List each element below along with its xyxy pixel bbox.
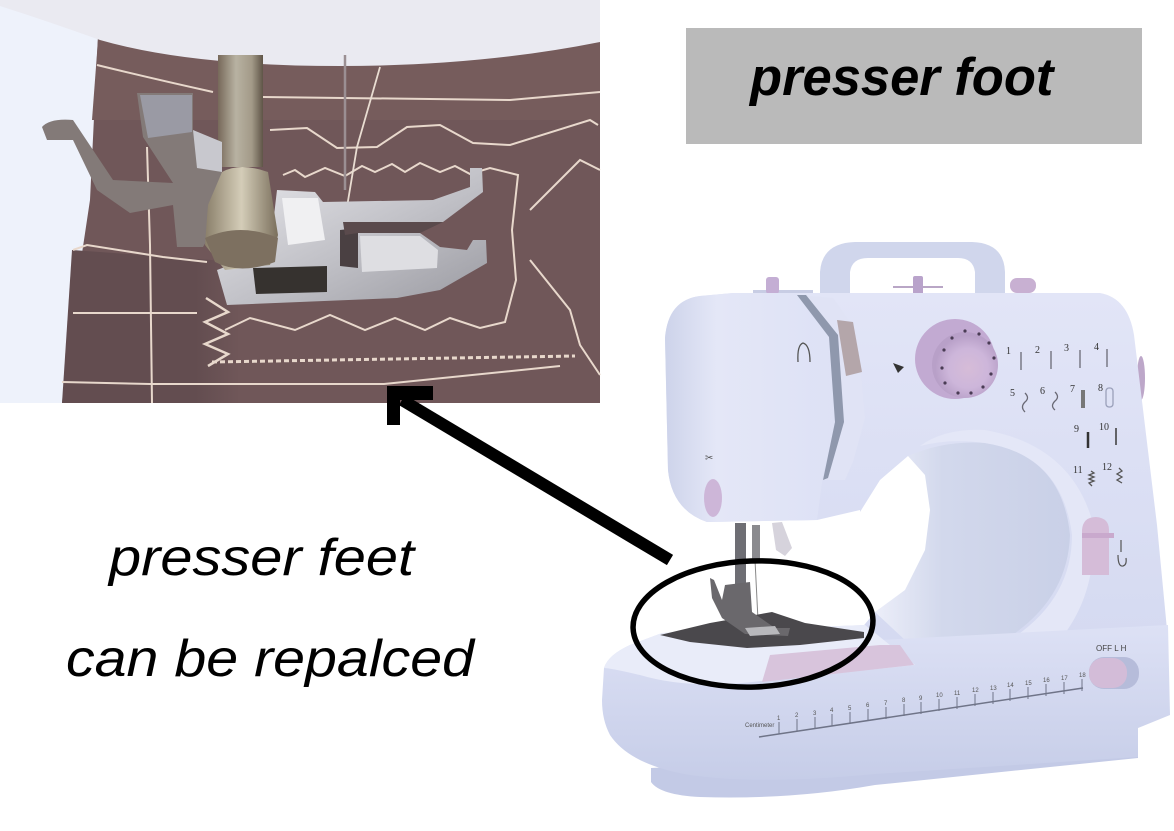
title box: presser foot — [686, 28, 1142, 144]
ruler: 8 — [902, 698, 906, 704]
stitch numbers: 5 — [1010, 388, 1015, 399]
small presser foot — [710, 578, 790, 636]
stitch numbers: 6 — [1040, 386, 1045, 397]
spool pins — [753, 276, 1145, 400]
stitch length slider — [1082, 517, 1126, 575]
stitch numbers: 1 — [1006, 346, 1011, 357]
stitch numbers: 9 — [1074, 424, 1079, 435]
ruler: 9 — [919, 696, 923, 702]
ruler: 7 — [884, 701, 888, 707]
ruler: 12 — [972, 688, 979, 694]
head shading — [665, 293, 837, 522]
empty space under head — [700, 456, 930, 640]
thumb screw — [205, 167, 278, 270]
arm opening interior — [875, 443, 1070, 640]
ruler: 5 — [848, 706, 852, 712]
ruler: 1 — [777, 716, 781, 722]
main body and column — [665, 293, 1168, 640]
highlight circle — [631, 557, 875, 691]
handle — [820, 242, 1005, 296]
thread and needle — [345, 55, 380, 263]
ruler: 11 — [954, 691, 961, 697]
stitch numbers: 4 — [1094, 342, 1099, 353]
caption text: can be repalced — [66, 630, 476, 688]
ruler: 14 — [1007, 683, 1014, 689]
stitch numbers: 2 — [1035, 345, 1040, 356]
icon: thread symbol — [798, 343, 810, 362]
caption text: presser feet — [107, 529, 417, 587]
ruler: 17 — [1061, 676, 1068, 682]
stitch numbers: 7 — [1070, 384, 1075, 395]
opening outer ring — [920, 430, 1093, 640]
switch — [1089, 644, 1139, 689]
icon: scissors mark: ✂ — [705, 453, 713, 464]
ruler: 3 — [813, 711, 817, 717]
machine foot — [651, 745, 1138, 798]
play marker — [893, 363, 904, 373]
stitch numbers: 10 — [1099, 422, 1109, 433]
panel: close-up photo of presser foot — [0, 0, 600, 403]
stitch numbers: 3 — [1064, 343, 1069, 354]
ruler: 6 — [866, 703, 870, 709]
ruler — [745, 673, 1086, 737]
foot holder and lever — [42, 93, 222, 247]
ruler: 18 — [1079, 673, 1086, 679]
presser foot plate — [217, 168, 487, 305]
ruler: 16 — [1043, 678, 1050, 684]
stitch pattern icons — [1021, 349, 1122, 486]
title box: presser foot: presser foot — [748, 48, 1056, 107]
caption text — [66, 529, 476, 688]
ruler: 4 — [830, 708, 834, 714]
base — [602, 625, 1170, 780]
illustration: sewing machine — [602, 242, 1170, 798]
base top surface — [604, 625, 915, 684]
fabric on machine — [660, 612, 864, 648]
stitch numbers: 12 — [1102, 462, 1112, 473]
arrow: from machine to close-up — [387, 386, 670, 560]
stitch numbers: 8 — [1098, 383, 1103, 394]
ruler: 15 — [1025, 681, 1032, 687]
ruler: 10 — [936, 693, 943, 699]
head button — [704, 479, 722, 517]
thread channel — [797, 295, 865, 480]
ruler: 13 — [990, 686, 997, 692]
needle assembly — [735, 522, 792, 620]
stitch numbers: 11 — [1073, 465, 1083, 476]
needle plate — [762, 645, 914, 682]
needle bar — [218, 55, 263, 167]
ruler: 2 — [795, 713, 799, 719]
ruler: Centimeter — [745, 723, 774, 729]
stitch selector dial — [915, 319, 998, 399]
switch: OFF L H — [1096, 644, 1127, 653]
stitch numbers — [1006, 342, 1112, 476]
